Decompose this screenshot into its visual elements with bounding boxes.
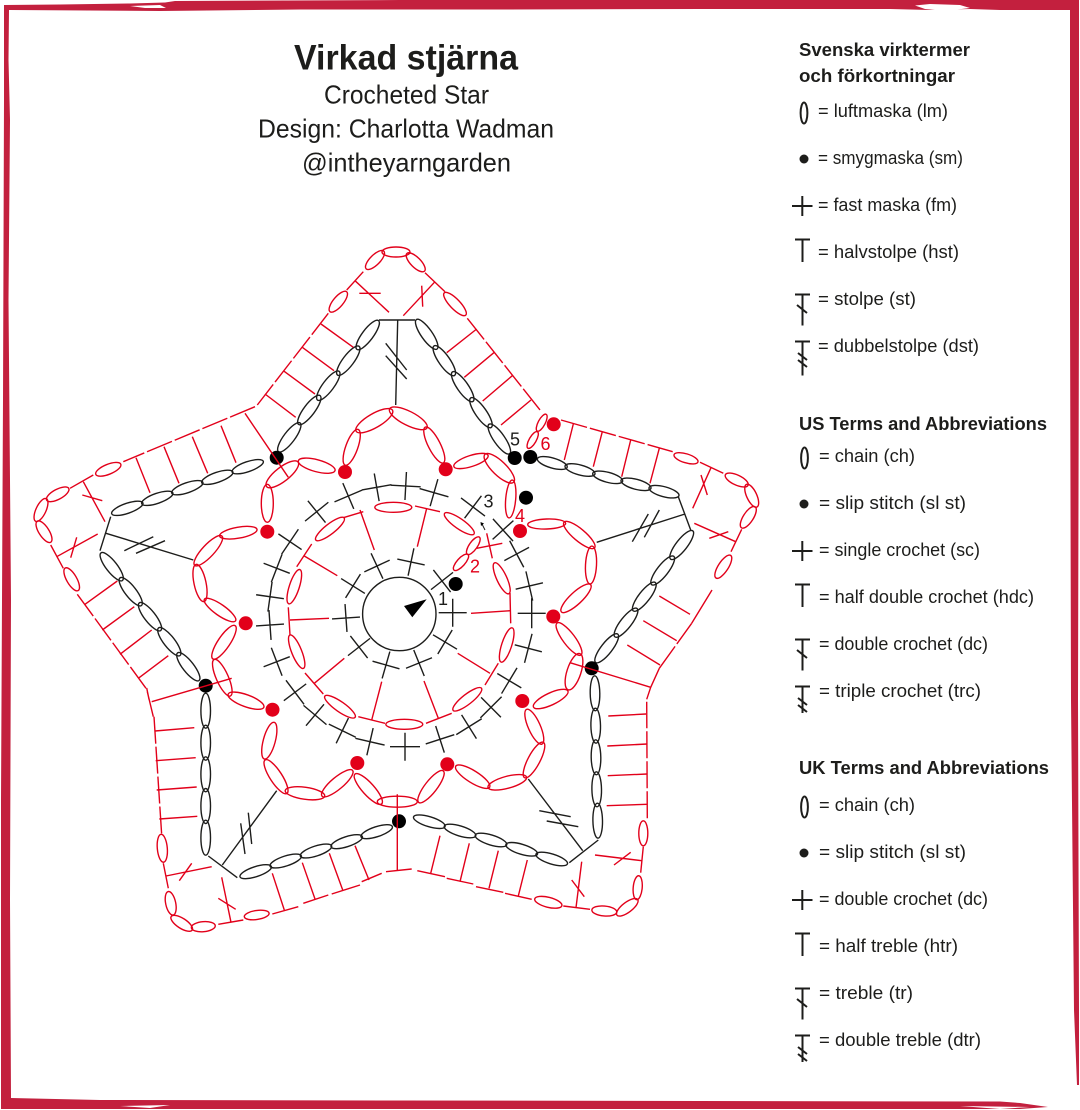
round 5: black double treble corner stitches [100, 320, 691, 878]
legend row: chain: = chain (ch) [819, 794, 915, 815]
instagram handle: @intheyarngarden [302, 148, 511, 178]
start arrowhead [404, 599, 427, 617]
UK heading: UK Terms and Abbreviations [799, 757, 1049, 778]
round 2: red chains and stitches [284, 502, 517, 729]
round 4: red petal chains [190, 403, 598, 808]
legend row: slip stitch: = slip stitch (sl st) [819, 841, 966, 862]
legend row: half treble: = half treble (htr) [819, 935, 958, 956]
legend row: double treble [795, 1029, 981, 1062]
round 3 label: 3 [484, 492, 494, 512]
round 3: black single crochet ring [254, 471, 546, 761]
Swedish heading: och förkortningar [799, 65, 955, 86]
legend row: double crochet: = stolpe (st) [818, 288, 916, 309]
legend: US terms [792, 413, 1047, 713]
round 5 label: 5 [510, 430, 520, 450]
round number labels [438, 430, 551, 609]
legend: Swedish terms [792, 39, 979, 376]
black slip stitches [199, 450, 599, 828]
round 4 label: 4 [515, 506, 525, 526]
legend row: double crochet: = double crochet (dc) [819, 633, 988, 654]
legend row: double crochet: = double crochet (dc) [819, 888, 988, 909]
round 1 label: 1 [438, 589, 448, 609]
legend row: treble [795, 982, 913, 1020]
legend row: half double crochet: = half double crochet (hdc) [819, 586, 1034, 607]
legend row: half double crochet: = halvstolpe (hst) [818, 241, 959, 262]
outer edge corner stitches [57, 281, 736, 922]
legend row: treble: = treble (tr) [819, 982, 913, 1003]
legend: UK terms [792, 757, 1049, 1062]
round 2 label: 2 [470, 556, 480, 576]
legend row: chain: = chain (ch) [819, 445, 915, 466]
title: Virkad stjärna [294, 38, 519, 78]
legend row: slip stitch: = smygmaska (sm) [818, 147, 963, 168]
round 1: single crochet stitches [331, 545, 467, 682]
crochet star chart [31, 247, 762, 934]
legend row: single crochet: = single crochet (sc) [819, 539, 980, 560]
US heading: US Terms and Abbreviations [799, 413, 1047, 434]
legend row: triple crochet: = triple crochet (trc) [819, 680, 981, 701]
legend row: treble crochet [795, 335, 979, 376]
legend row: chain stitch: = luftmaska (lm) [818, 100, 948, 121]
round 6 label: 6 [540, 434, 551, 454]
legend row: triple crochet [795, 680, 981, 713]
round 1: magic ring [363, 577, 436, 651]
legend row: double crochet [795, 633, 988, 670]
round 6: outer red edge lines [51, 272, 742, 924]
legend row: double crochet [795, 288, 916, 326]
designer credit: Design: Charlotta Wadman [258, 114, 554, 144]
direction arrow [480, 522, 485, 530]
legend row: single crochet: = fast maska (fm) [818, 194, 957, 215]
red slip stitches [239, 417, 561, 771]
round 6: outer red edge chains [31, 247, 762, 934]
Swedish heading: Svenska virktermer [799, 39, 970, 60]
legend row: slip stitch: = slip stitch (sl st) [819, 492, 966, 513]
title block [258, 38, 554, 178]
legend row: double treble: = double treble (dtr) [819, 1029, 981, 1050]
round 5: black chains [97, 316, 697, 882]
subtitle: Crocheted Star [324, 80, 489, 110]
Swedish heading [799, 39, 970, 86]
legend row: treble crochet: = dubbelstolpe (dst) [818, 335, 979, 356]
outer edge stitches [85, 324, 690, 910]
